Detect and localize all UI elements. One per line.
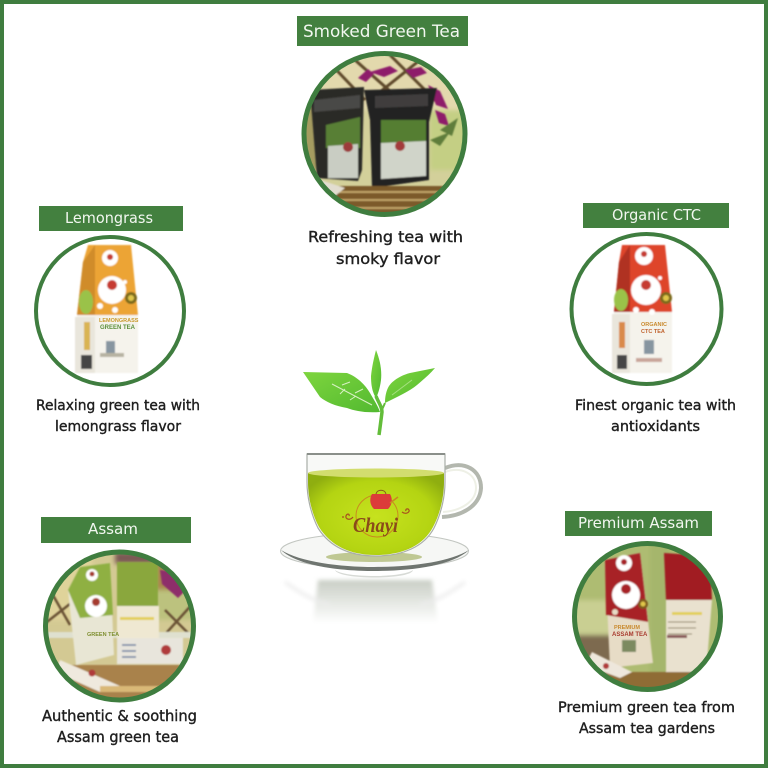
photo: organic CTC box [612,244,673,374]
caption: lemongrass flavor [55,419,181,435]
heading: Lemongrass: Lemongrass [65,209,153,227]
heading: Premium Assam [565,511,712,536]
panel: Premium Assam [558,511,735,737]
photo: Assam box and leaflet: GREEN TEA [87,632,119,638]
heading: Smoked Green Tea: Smoked Green Tea [303,22,460,42]
caption: smoky flavor [336,250,441,268]
caption: Assam tea gardens [579,721,715,737]
caption: Premium green tea from [558,700,735,716]
heading: Premium Assam: Premium Assam [578,514,699,532]
heading: Smoked Green Tea [297,16,468,46]
caption [558,700,735,737]
circle outline [572,234,722,384]
circle outline [36,237,184,385]
circle outline [46,552,194,700]
caption [36,398,200,435]
caption: Refreshing tea with [308,228,463,246]
handle [442,465,481,517]
photo: premium Assam box and back: ASSAM TEA [612,632,648,638]
photo: organic CTC box: CTC TEA [641,329,665,335]
tea [308,470,444,555]
photo: lemongrass box [74,244,139,374]
cup glass [307,454,445,556]
caption: Relaxing green tea with [36,398,200,414]
caption: Authentic & soothing [42,707,197,725]
photo: premium Assam box and back: PREMIUM [614,625,640,631]
heading: Lemongrass [39,206,183,231]
panel: Assam [41,517,197,746]
heading: Organic CTC [583,203,729,228]
caption: Assam green tea [57,728,179,746]
photo: smoked tea bags [306,56,462,212]
cup logo [342,490,409,537]
photo: lemongrass box: GREEN TEA [100,325,136,331]
caption: antioxidants [611,419,700,435]
heading: Organic CTC: Organic CTC [612,206,701,224]
cup logo: Chayi [353,513,398,537]
heading: Assam [41,517,191,543]
caption [575,398,736,435]
reflection [285,580,465,623]
photo: Assam box and leaflet [48,554,191,698]
illustration: tea cup and saucer [280,453,481,623]
panel: Smoked Green Tea [297,16,470,268]
circle outline [574,544,720,690]
caption: Finest organic tea with [575,398,736,414]
photo: organic CTC box: ORGANIC [641,322,667,328]
photo: lemongrass box: LEMONGRASS [99,318,139,324]
heading: Assam: Assam [88,520,138,538]
panel: Lemongrass [34,206,200,435]
illustration: tea leaves [303,350,435,435]
caption [42,707,197,746]
caption [308,228,463,268]
saucer [280,533,469,578]
photo: premium Assam box and back [577,546,718,687]
panel: Organic CTC [569,203,736,435]
circle outline [304,54,465,214]
